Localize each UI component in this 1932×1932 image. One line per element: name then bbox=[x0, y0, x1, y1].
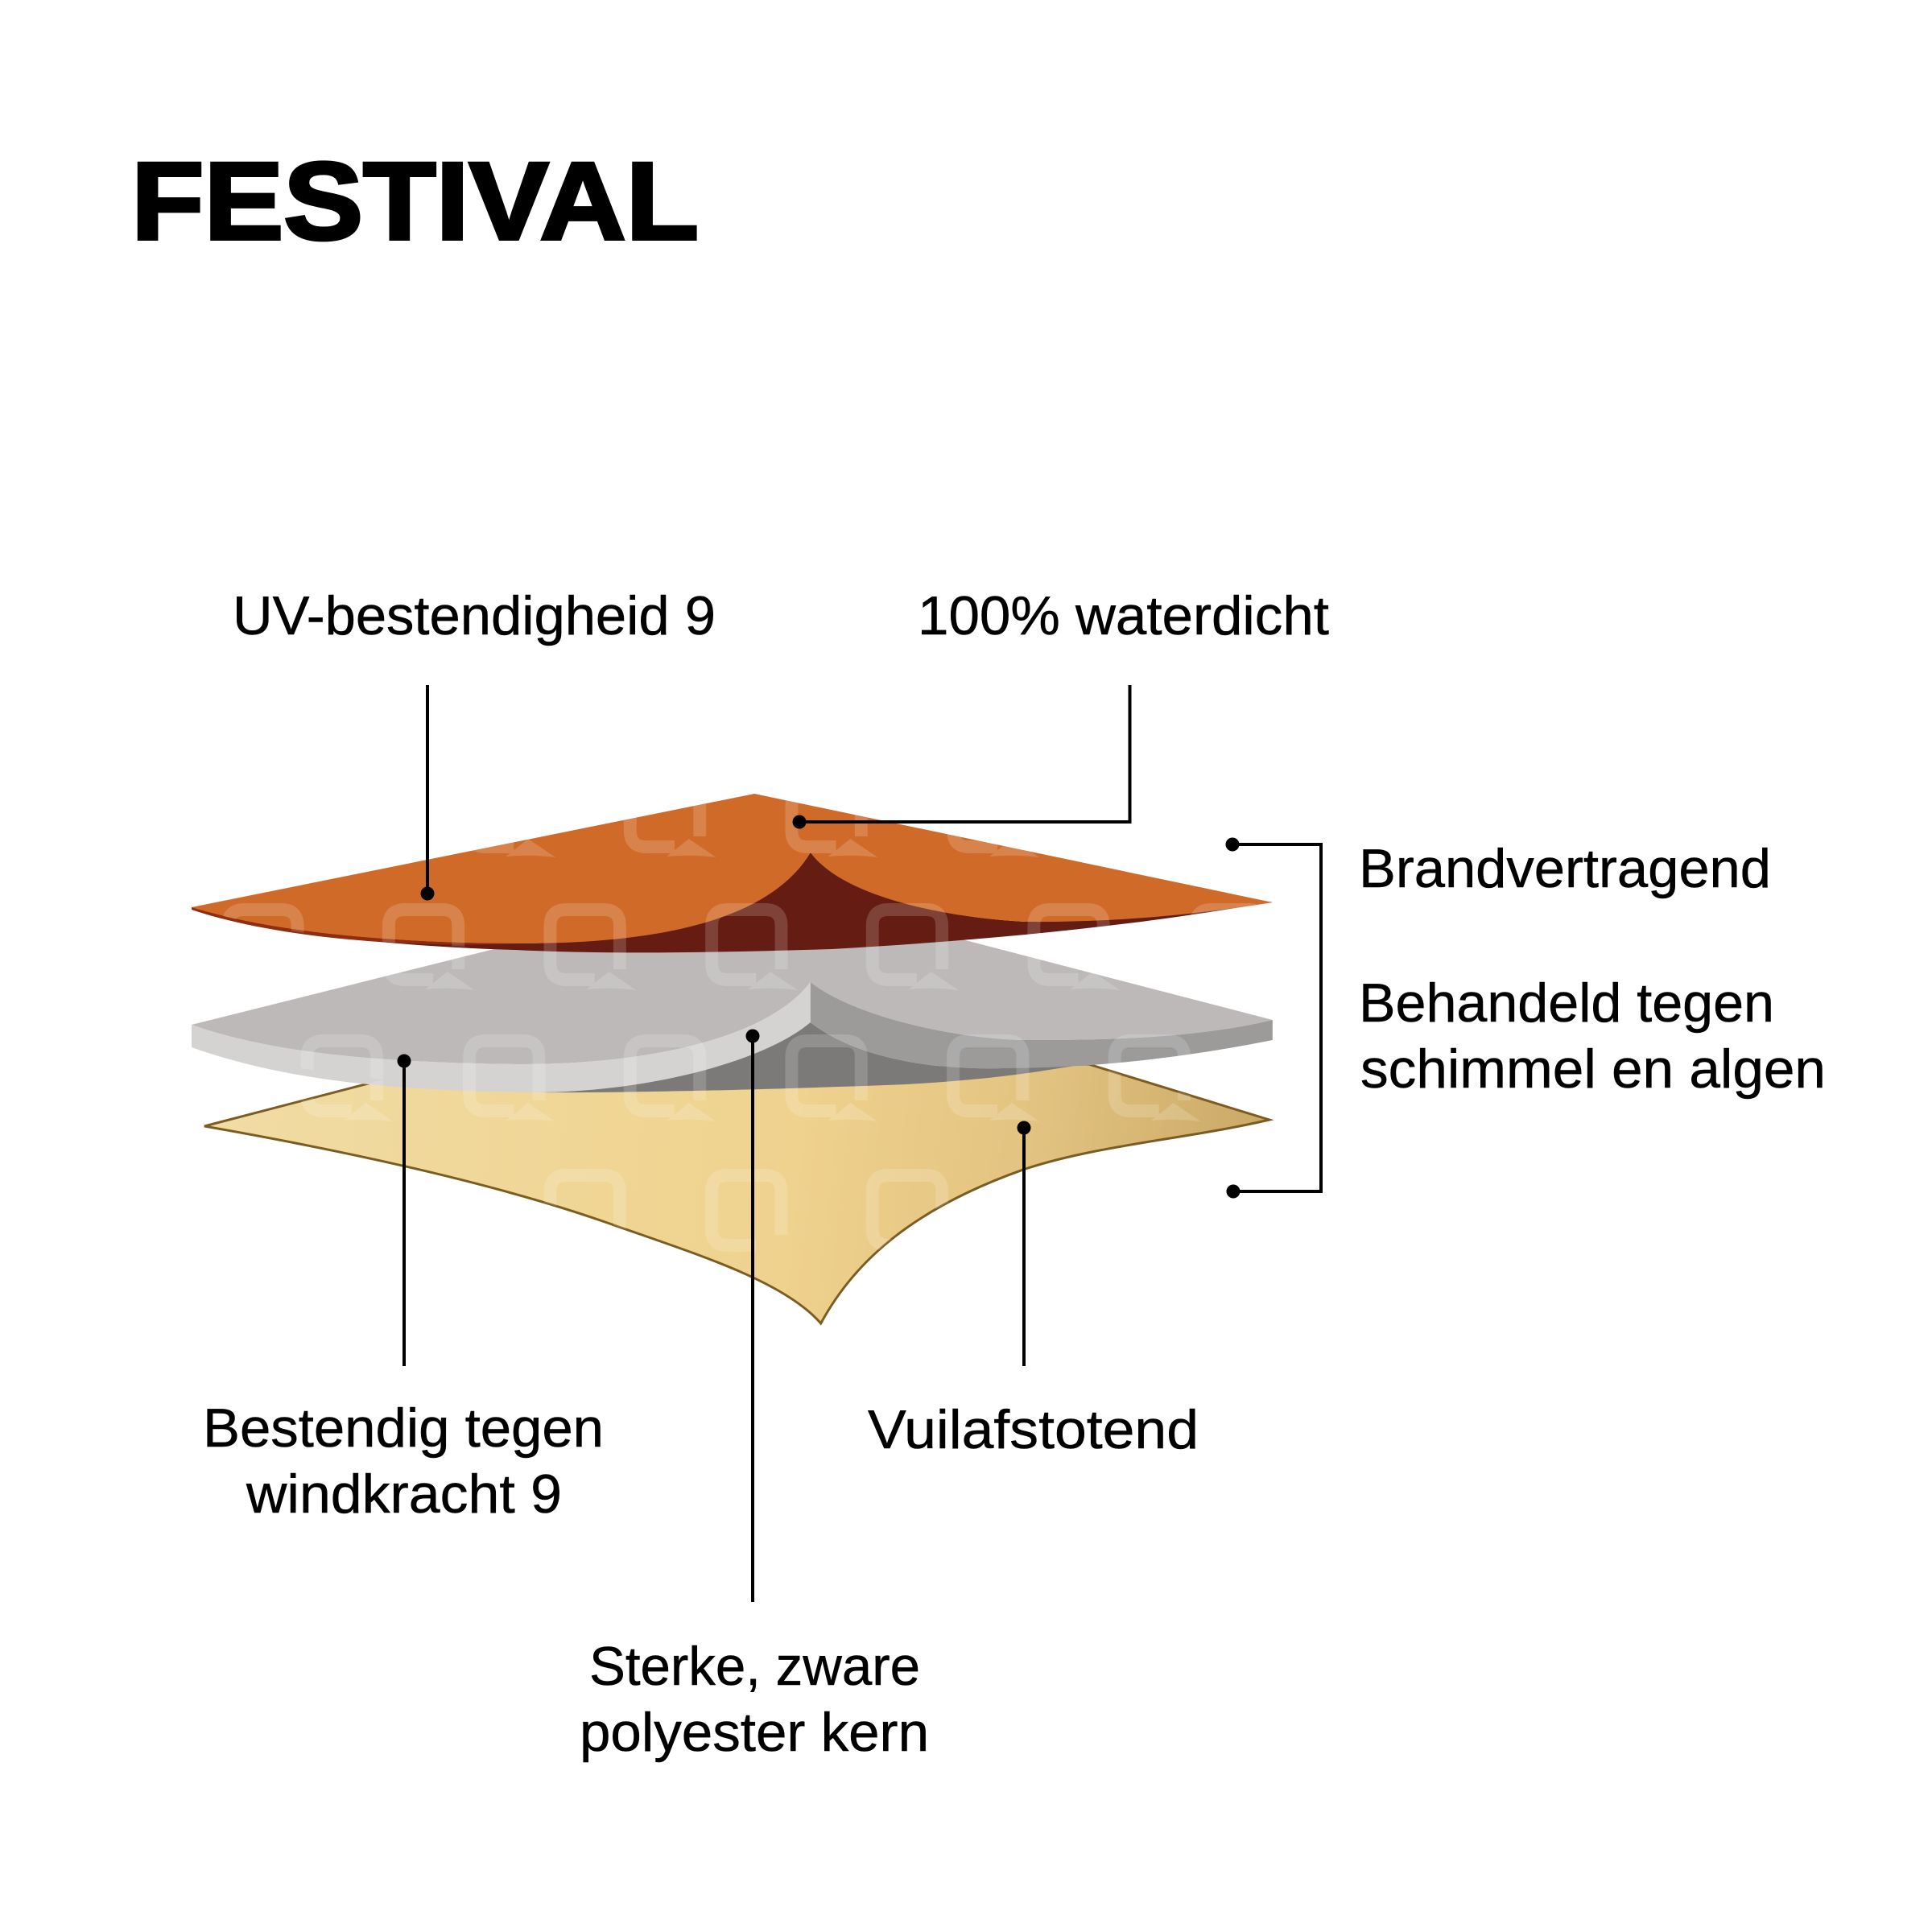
label: Brandvertragend: Brandvertragend bbox=[1359, 838, 1771, 899]
layer: yellow backing fabric bbox=[204, 1064, 1269, 1323]
callout: Bestendig tegen windkracht 9: Bestendig tegen bbox=[203, 1397, 604, 1459]
layer: grey core top surface bbox=[192, 885, 1273, 1064]
callout: Sterke, zware polyester kern bbox=[580, 1029, 929, 1763]
layer: orange lip bbox=[192, 907, 520, 944]
callout: UV-bestendigheid 9: UV-bestendigheid 9 bbox=[233, 585, 716, 646]
callout: Bestendig tegen windkracht 9 bbox=[203, 1055, 604, 1525]
watermark logos bbox=[228, 777, 1282, 1245]
layer: grey core underside bbox=[535, 1022, 1084, 1092]
callout: Bestendig tegen windkracht 9: windkracht 9 bbox=[246, 1463, 562, 1525]
callout: Vuilafstotend: Vuilafstotend bbox=[868, 1399, 1199, 1460]
layer: orange inner dark underside bbox=[192, 852, 1273, 952]
callout: Sterke, zware polyester kern: Sterke, zware bbox=[589, 1636, 920, 1697]
callout: 100% waterdicht: 100% waterdicht bbox=[918, 585, 1329, 646]
callout: 100% waterdicht bbox=[792, 585, 1329, 829]
bracket connector bbox=[1225, 837, 1321, 1198]
callout: Sterke, zware polyester kern: polyester kern bbox=[580, 1702, 929, 1763]
callout: UV-bestendigheid 9 bbox=[233, 585, 716, 900]
label: Behandeld tegen schimmel en algen: Behandeld tegen bbox=[1359, 972, 1774, 1034]
layer: grey core shaded edge bbox=[811, 982, 1273, 1068]
title: FESTIVAL bbox=[131, 140, 699, 263]
label: Behandeld tegen schimmel en algen: schimmel en algen bbox=[1360, 1038, 1826, 1100]
layer: grey core light edge bbox=[192, 982, 811, 1092]
layer: orange top sheet bbox=[192, 794, 1273, 943]
label: Behandeld tegen schimmel en algen bbox=[1359, 972, 1826, 1100]
callout: Vuilafstotend bbox=[868, 1121, 1199, 1460]
layered fabric diagram bbox=[192, 777, 1282, 1323]
